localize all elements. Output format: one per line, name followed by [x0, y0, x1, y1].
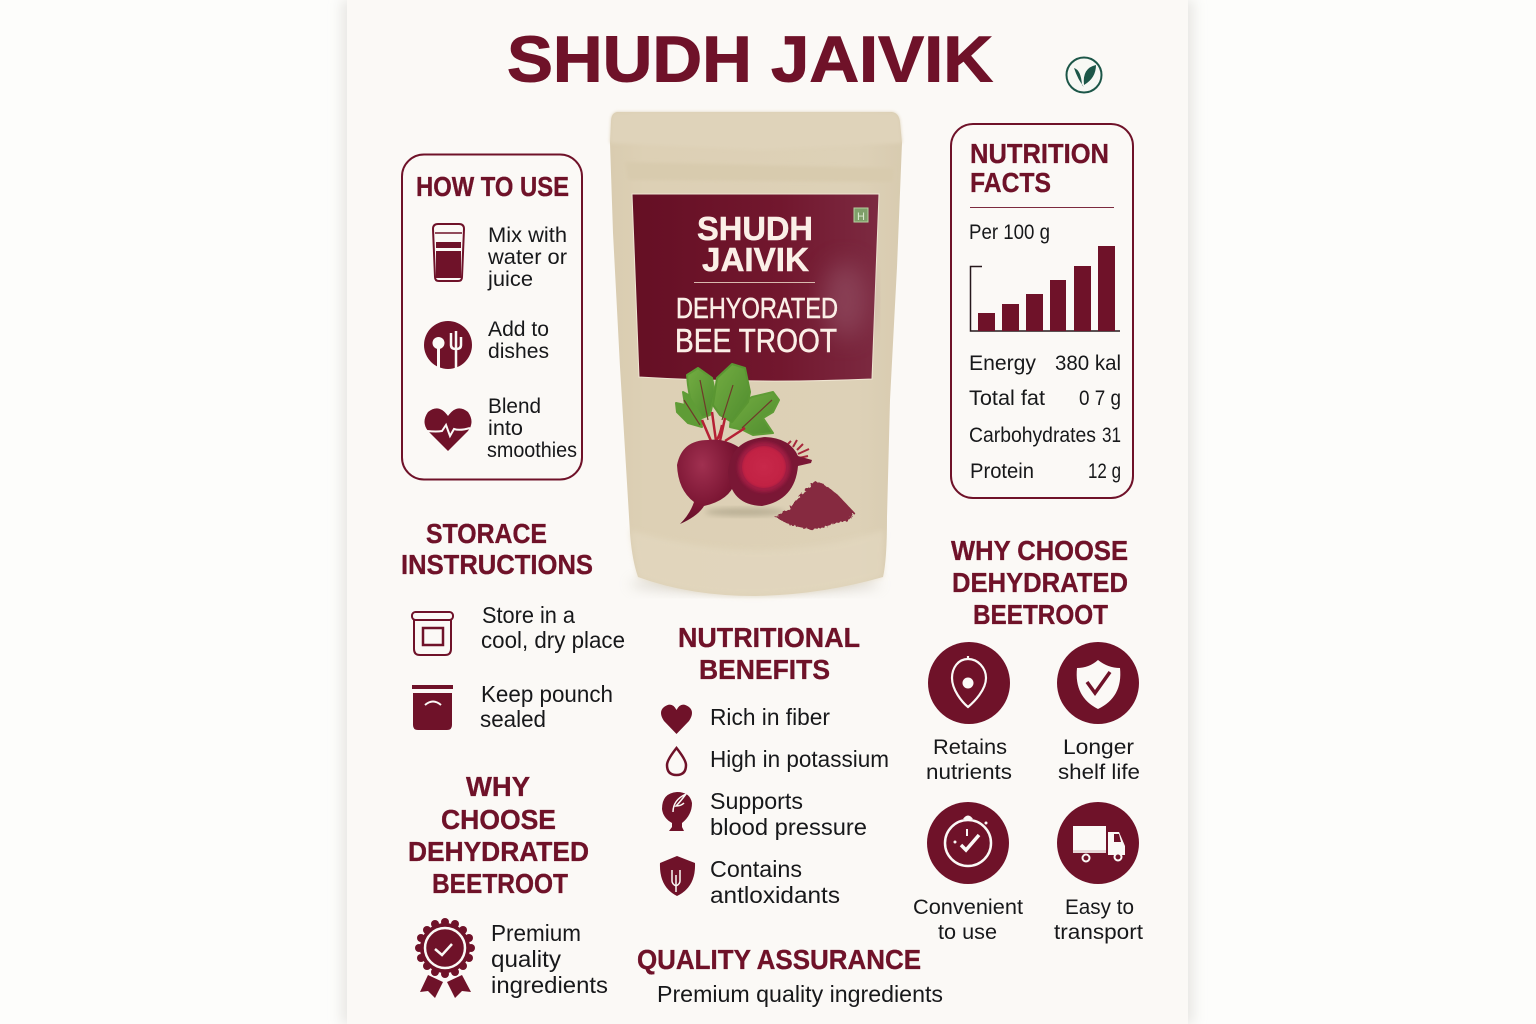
text: premium quality ingredients: quality: [491, 946, 562, 972]
text: keep pouch sealed: sealed: [480, 706, 546, 732]
text: blend into smoothies: smoothies: [487, 439, 577, 462]
text: keep pouch sealed: [480, 681, 613, 732]
text: add to dishes: dishes: [488, 340, 549, 363]
nutrition rows: Carbohydrates: [969, 424, 1096, 447]
text: premium quality ingredients: Premium quality ingredients: [657, 981, 943, 1007]
beetroot leaves: [676, 364, 779, 441]
nutrition rows: 380 kal: [1055, 352, 1121, 375]
pouch product image: [610, 112, 902, 596]
text: blend into smoothies: Blend: [488, 395, 541, 418]
text: high in potassium: High in potassium: [710, 746, 889, 772]
text: rich in fiber: Rich in fiber: [710, 704, 830, 730]
heading: how to use: HOW TO USE: [416, 171, 569, 202]
text: retains nutrients: Retains: [933, 736, 1007, 759]
heading: why choose dehydrated beetroot: WHY CHOOSE: [951, 535, 1128, 566]
label text: BEE TROOT: [675, 322, 837, 359]
icon: heart with pulse: [424, 408, 472, 451]
heading: why choose dehydrated beetroot: BEETROOT: [973, 599, 1108, 630]
icon: leaf bulb: [662, 792, 692, 831]
heading: nutrition facts: [970, 138, 1109, 198]
beet powder pile: [775, 481, 855, 530]
icon: drop: [667, 748, 686, 775]
heading: quality assurance: QUALITY ASSURANCE: [637, 944, 921, 975]
icon: sealed pouch: [412, 685, 453, 730]
panel: storage instructions: [401, 518, 625, 732]
heading: why choose dehydrated beetroot: CHOOSE: [441, 804, 556, 835]
icon: retains nutrients: [928, 642, 1010, 724]
text: blend into smoothies: [487, 395, 577, 462]
maroon label: [632, 194, 879, 381]
heading: why choose dehydrated beetroot: [951, 535, 1128, 630]
text: mix with water or juice: water or: [487, 246, 567, 269]
label text: DEHYORATED: [676, 293, 838, 325]
nutrition rows: 12 g: [1088, 460, 1121, 483]
panel: nutrition facts: [951, 124, 1133, 498]
heading: why choose dehydrated beetroot: DEHYDRATED: [408, 836, 589, 867]
text: easy to transport: transport: [1054, 921, 1143, 944]
text: convenient to use: [913, 896, 1023, 944]
text: retains nutrients: [926, 736, 1012, 784]
text: premium quality ingredients: [491, 920, 608, 998]
label badge: [854, 208, 868, 223]
text: mix with water or juice: [487, 224, 567, 291]
text: supports blood pressure: blood pressure: [710, 814, 867, 840]
heading: storage instructions: INSTRUCTIONS: [401, 549, 593, 580]
soft shadow under beets: [705, 508, 785, 516]
panel: how to use: [402, 154, 582, 480]
label text: JAIVIK: [702, 241, 809, 278]
panel: nutritional benefits: [660, 622, 889, 908]
icon: glass of juice: [433, 224, 464, 281]
nutrition rows: Energy: [969, 352, 1036, 375]
whole beetroot: [677, 440, 740, 524]
panel: quality assurance: [637, 944, 943, 1007]
text: mix with water or juice: Mix with: [488, 224, 567, 247]
heading: nutritional benefits: NUTRITIONAL: [678, 622, 860, 653]
text: blend into smoothies: into: [488, 417, 523, 440]
heading: storage instructions: [401, 518, 593, 580]
text: add to dishes: Add to: [488, 318, 549, 341]
heading: nutrition facts: NUTRITION: [970, 138, 1109, 169]
text: store in a cool, dry place: [481, 602, 625, 653]
text: longer shelf life: Longer: [1063, 736, 1134, 759]
bar chart: [970, 246, 1120, 331]
icon: rosette award: [415, 918, 475, 998]
title: SHUDH JAIVIK: [507, 22, 993, 96]
text: easy to transport: [1054, 896, 1143, 944]
icon: easy to transport: [1057, 802, 1139, 884]
beetroot stems: [702, 412, 745, 441]
heading: why choose dehydrated beetroot: DEHYDRATED: [952, 567, 1128, 598]
text: premium quality ingredients: Premium: [491, 920, 581, 946]
pouch body: [610, 112, 902, 596]
text: convenient to use: to use: [938, 921, 997, 944]
nutrition rows: Total fat: [969, 387, 1045, 410]
icon: longer shelf life: [1057, 642, 1139, 724]
heading: why choose dehydrated beetroot: BEETROOT: [432, 868, 568, 899]
nutrition rows: Protein: [970, 460, 1034, 483]
cut beetroot: [728, 437, 812, 506]
text: supports blood pressure: Supports: [710, 788, 803, 814]
label text: SHUDH: [697, 210, 813, 247]
text: longer shelf life: shelf life: [1058, 761, 1140, 784]
text: add to dishes: [488, 318, 549, 363]
text: store in a cool, dry place: cool, dry place: [481, 627, 625, 653]
icon: antioxidant shield: [660, 856, 695, 896]
heading: nutritional benefits: [678, 622, 860, 685]
icon: spoon and fork: [424, 321, 472, 369]
icon: heart: [661, 705, 692, 734]
nutrition rows: [969, 352, 1121, 483]
nutrition rows: 0 7 g: [1079, 387, 1121, 410]
text: convenient to use: Convenient: [913, 896, 1023, 919]
text: contains antioxidants: Contains: [710, 856, 802, 882]
heading: why choose dehydrated beetroot: WHY: [466, 771, 530, 802]
text: contains antioxidants: [710, 856, 840, 908]
heading: storage instructions: STORACE: [426, 518, 547, 549]
panel: why choose, left: [408, 771, 608, 998]
icon: convenient to use: [927, 802, 1009, 884]
text: retains nutrients: nutrients: [926, 761, 1012, 784]
heading: why choose dehydrated beetroot: [408, 771, 589, 899]
text: contains antioxidants: antloxidants: [710, 882, 840, 908]
nutrition rows: 31: [1102, 424, 1121, 447]
icon: storage jar: [412, 612, 453, 655]
text: premium quality ingredients: ingredients: [491, 972, 608, 998]
text: mix with water or juice: juice: [487, 268, 533, 291]
heading: nutrition facts: FACTS: [970, 167, 1051, 198]
text: per 100 g: Per 100 g: [969, 221, 1050, 244]
label text: [675, 210, 838, 359]
icon: green leaf certification badge: [1066, 58, 1102, 92]
text: store in a cool, dry place: Store in a: [482, 602, 575, 628]
text: keep pouch sealed: Keep pounch: [481, 681, 613, 707]
panel: why choose, right: [913, 535, 1143, 944]
text: longer shelf life: [1058, 736, 1140, 784]
text: supports blood pressure: [710, 788, 867, 840]
heading: nutritional benefits: BENEFITS: [699, 654, 830, 685]
label badge: H: [857, 211, 865, 223]
text: easy to transport: Easy to: [1065, 896, 1134, 919]
